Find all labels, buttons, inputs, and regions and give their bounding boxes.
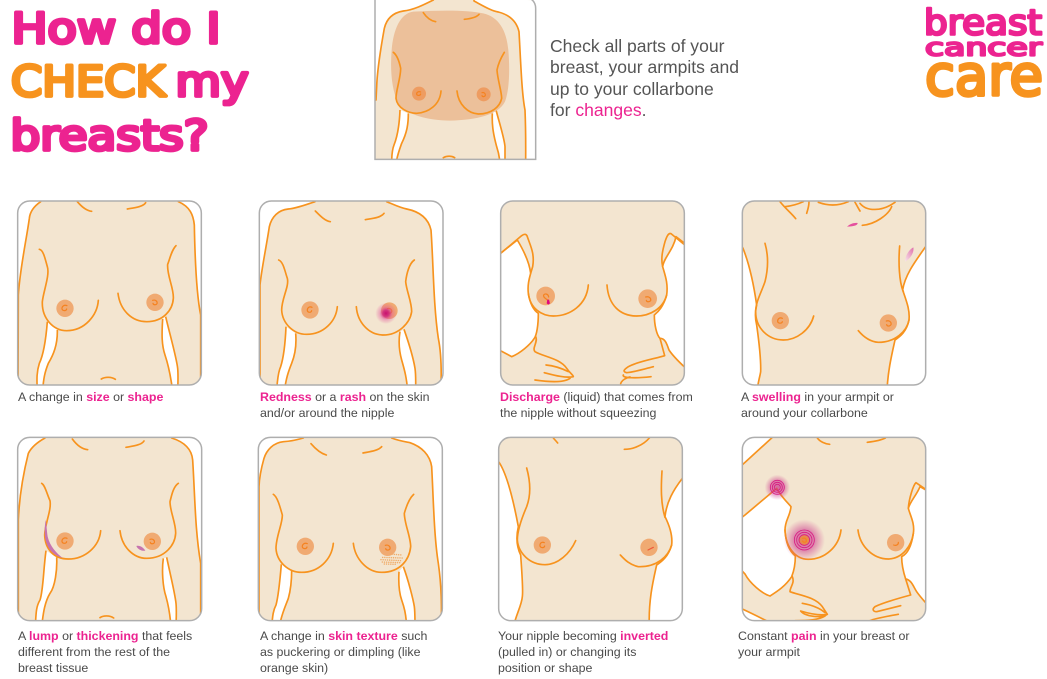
caption: constant pain: Constant pain in your breast or — [738, 629, 910, 643]
pain: breast — [784, 519, 825, 561]
caption: inverted nipple: (pulled in) or changing its — [498, 645, 636, 659]
caption: size or shape: A change in size or shape — [18, 390, 163, 404]
logo: care — [925, 44, 1043, 109]
caption: skin texture: orange skin) — [260, 661, 328, 675]
caption: lump or thickening: breast tissue — [18, 661, 88, 675]
panel: size or shape — [16, 200, 202, 386]
panel: lump or thickening — [16, 436, 202, 622]
caption: inverted nipple: Your nipple becoming inverted — [498, 629, 668, 643]
logo — [924, 4, 1043, 109]
caption: swelling: A swelling in your armpit or — [741, 390, 894, 404]
title: my — [176, 57, 248, 106]
caption: redness or rash: and/or around the nipple — [260, 406, 394, 420]
caption: constant pain: your armpit — [738, 645, 801, 659]
instruction text: for changes. — [550, 100, 647, 120]
caption: skin texture: A change in skin texture such — [260, 629, 427, 643]
instruction text: breast, your armpits and — [550, 57, 739, 77]
swelling marks — [847, 223, 914, 262]
caption: lump or thickening: different from the rest of the — [18, 645, 170, 659]
caption: discharge: the nipple without squeezing — [500, 406, 656, 420]
caption: lump or thickening: A lump or thickening that feels — [18, 629, 192, 643]
caption: skin texture: as puckering or dimpling (like — [260, 645, 421, 659]
panel: constant pain — [742, 436, 926, 622]
caption: swelling: around your collarbone — [741, 406, 868, 420]
caption: inverted nipple: position or shape — [498, 661, 592, 675]
title — [10, 4, 248, 160]
inverted mark — [648, 547, 653, 550]
logo: breast — [924, 4, 1042, 44]
caption: discharge: Discharge (liquid) that comes from — [500, 390, 693, 404]
discharge drop — [547, 300, 550, 305]
panel: discharge — [490, 201, 693, 385]
caption: redness or rash: Redness or a rash on the skin — [260, 390, 429, 404]
panel: swelling — [735, 201, 935, 392]
title: breasts? — [10, 111, 209, 160]
title: CHECK — [11, 57, 167, 106]
instruction text: Check all parts of your — [550, 36, 725, 56]
instruction text: up to your collarbone — [550, 79, 714, 99]
lump marks — [45, 520, 145, 558]
panel: inverted nipple — [490, 437, 690, 627]
texture dots — [381, 554, 403, 564]
panel: redness or rash — [258, 200, 444, 386]
rash — [375, 303, 397, 324]
panel: skin texture — [258, 436, 444, 622]
title: How do I — [12, 4, 220, 53]
pain: armpit — [765, 475, 790, 500]
logo: cancer — [925, 34, 1042, 62]
panel: area to check illustration — [370, 0, 540, 163]
